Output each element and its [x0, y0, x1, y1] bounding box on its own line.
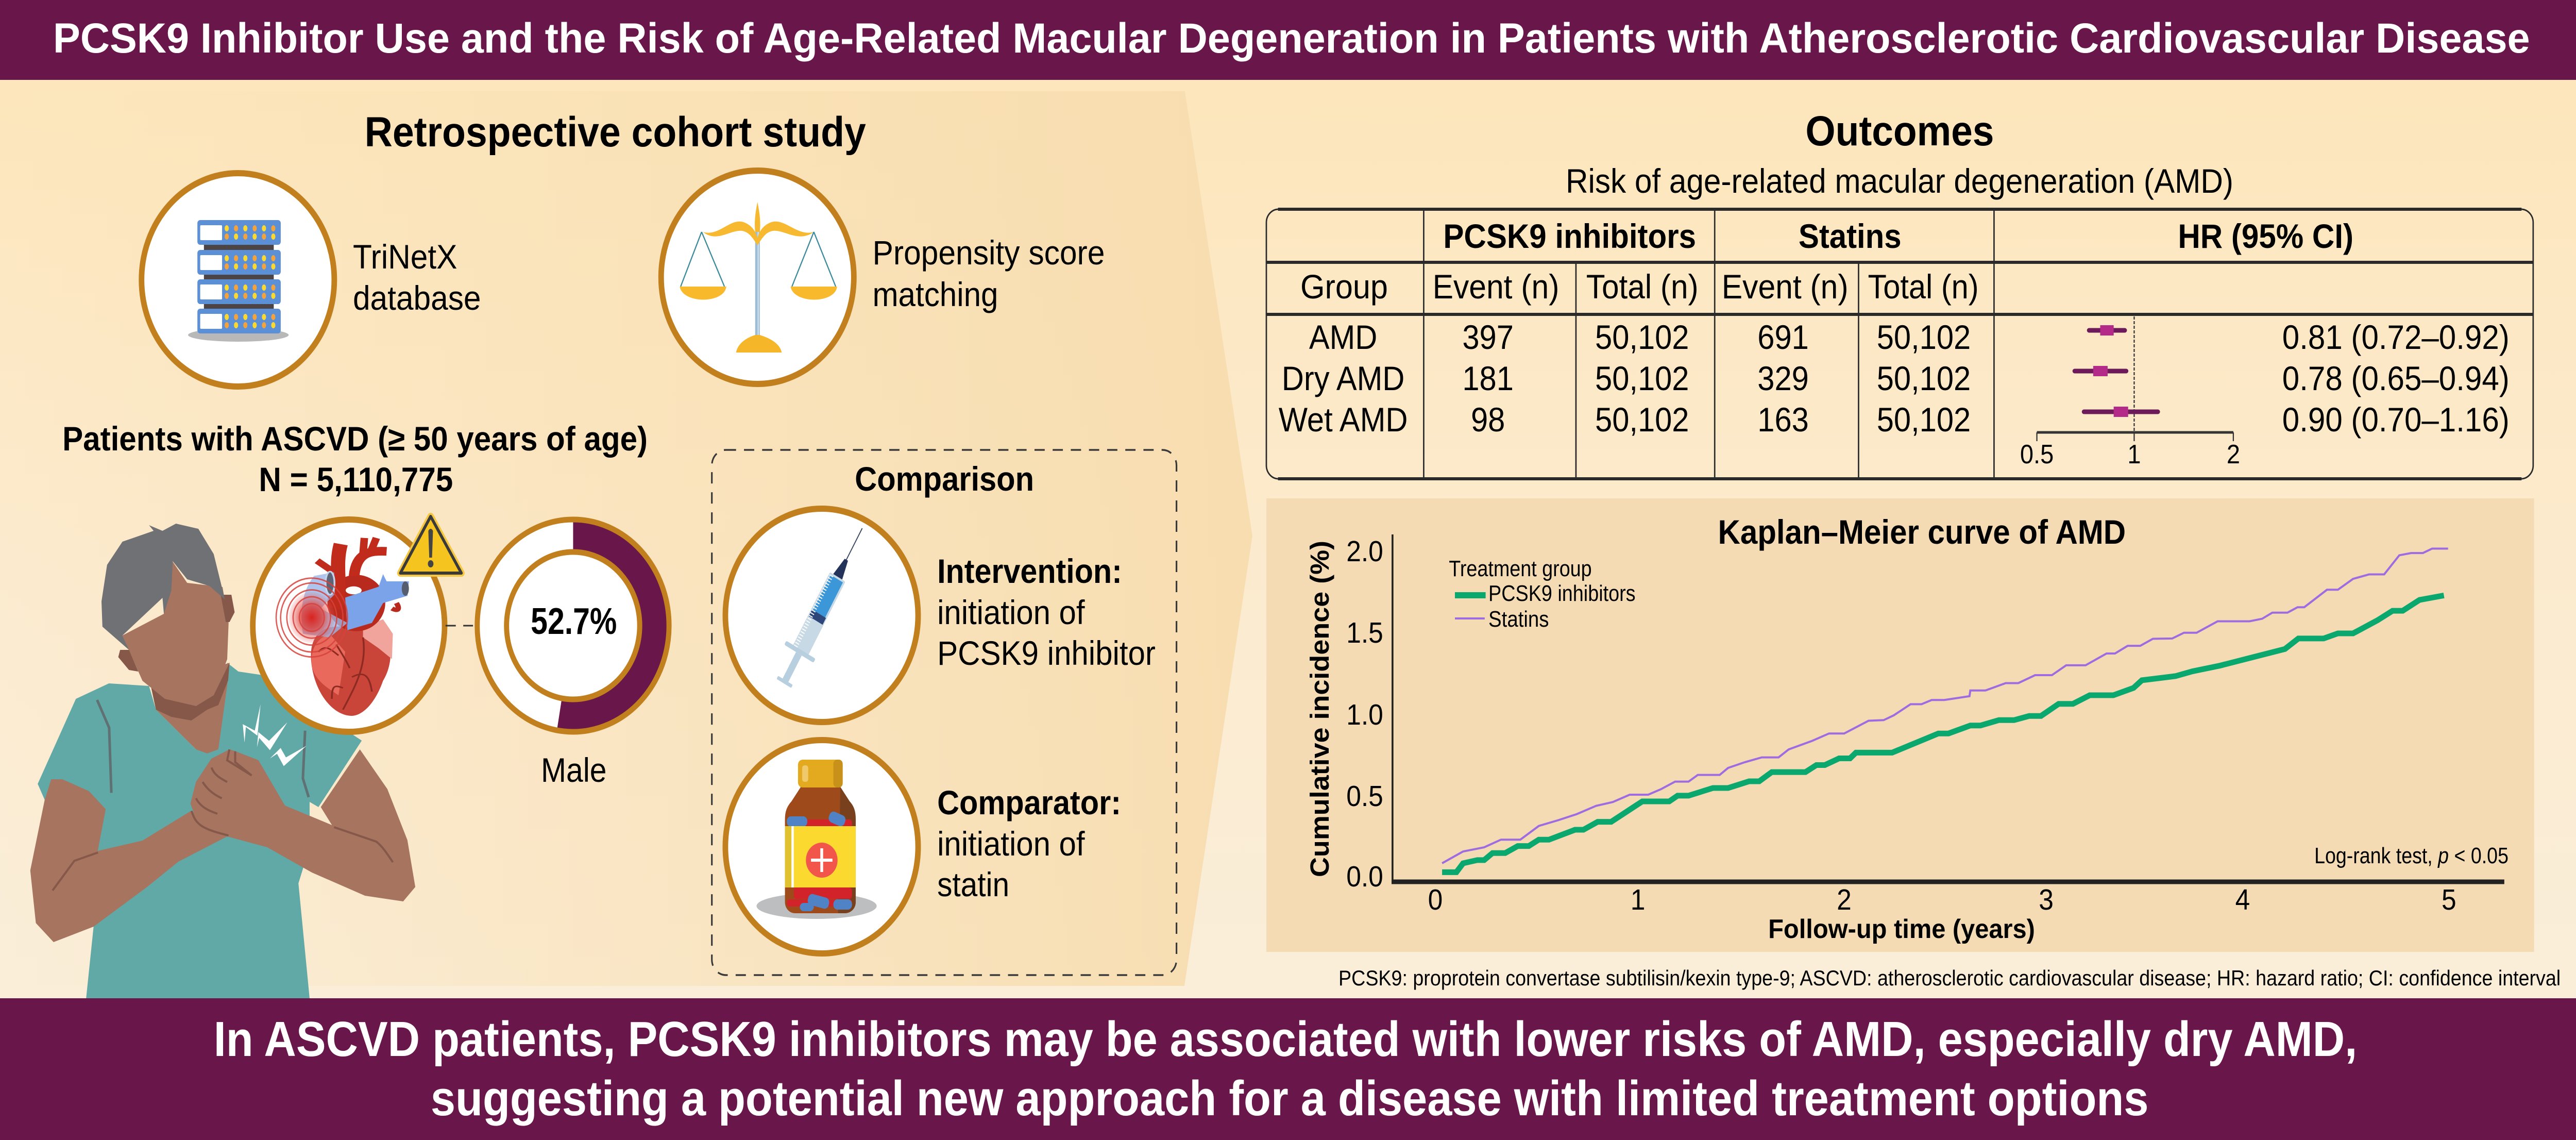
table header row: Statins: [1799, 217, 1902, 256]
icon: syringe: [725, 509, 918, 722]
table row: AMD: 50,102: [1877, 318, 1971, 357]
table row: AMD: 50,102: [1595, 318, 1689, 357]
curve: statins: [1442, 548, 2448, 863]
y axis tick labels: [1346, 535, 1383, 893]
text: intervention: Intervention:: [937, 552, 1122, 591]
title banner: PCSK9 Inhibitor Use and the Risk of Age-Related Macular Degeneration in Patients with Atherosclerotic Cardiovascular Disease: [53, 14, 2530, 62]
panel: comparison: [712, 450, 1177, 975]
table subheader row: [1300, 268, 1979, 306]
annotation: log-rank test: Log-rank test, p < 0.05: [2314, 843, 2509, 868]
table row: dry AMD: 50,102: [1877, 360, 1971, 398]
x axis tick labels: 3: [2039, 883, 2054, 916]
text: comparator: [937, 784, 1121, 904]
footnote: abbreviations: PCSK9: proprotein convertase subtilisin/kexin type-9; ASCVD: atherosclerotic cardiovascular disease; HR: hazard ratio; CI: confidence interval: [1338, 966, 2561, 990]
table row: dry AMD: 50,102: [1595, 360, 1689, 398]
x axis tick labels: 4: [2235, 883, 2250, 916]
table subheader row: Event (n): [1433, 268, 1559, 306]
subheading: risk of AMD: Risk of age-related macular degeneration (AMD): [1566, 162, 2233, 200]
y axis tick labels: 1.0: [1346, 698, 1383, 731]
icon: warning triangle: [400, 516, 462, 573]
text: intervention: initiation of: [937, 594, 1085, 632]
y axis tick labels: 1.5: [1346, 616, 1383, 649]
x axis tick labels: [1428, 883, 2456, 916]
table row: AMD: 691: [1757, 318, 1809, 357]
table row: wet AMD: 98: [1471, 401, 1505, 439]
icon: pill bottle: [725, 740, 918, 953]
text: TriNetX database: [353, 238, 481, 317]
table row: wet AMD: 0.90 (0.70–1.16): [2282, 401, 2510, 439]
chart legend: Treatment group: [1449, 556, 1592, 581]
table row: dry AMD: 329: [1757, 360, 1809, 398]
heading: retrospective cohort study: Retrospective cohort study: [365, 108, 866, 156]
table header row: PCSK9 inhibitors: [1443, 217, 1696, 256]
heading: outcomes: Outcomes: [1805, 107, 1994, 155]
donut chart: male 52.7%: 52.7%: [531, 600, 617, 642]
table subheader row: Total (n): [1868, 268, 1979, 306]
y axis tick labels: 2.0: [1346, 535, 1383, 568]
table subheader row: Total (n): [1586, 268, 1699, 306]
x axis tick labels: 0: [1428, 883, 1443, 916]
heading: comparison: Comparison: [855, 460, 1034, 498]
table row: dry AMD: 181: [1462, 360, 1514, 398]
label: male: Male: [541, 751, 606, 790]
table header row: [1443, 217, 2353, 256]
forest plot: [2020, 316, 2240, 470]
text: patients with ASCVD: N = 5,110,775: [259, 461, 453, 499]
x axis tick labels: 2: [1837, 883, 1852, 916]
table row: dry AMD: 0.78 (0.65–0.94): [2282, 360, 2510, 398]
table row: wet AMD: Wet AMD: [1279, 401, 1408, 439]
axis lines: [1392, 534, 2504, 884]
text: patients with ASCVD: [62, 420, 648, 499]
text: propensity score matching: [872, 234, 1105, 314]
table subheader row: Event (n): [1722, 268, 1849, 306]
icon: TriNetX database server: [142, 173, 334, 387]
table row: wet AMD: [1279, 401, 2510, 439]
text: patients with ASCVD: Patients with ASCVD (≥ 50 years of age): [62, 420, 648, 458]
text: TriNetX database: TriNetX: [353, 238, 457, 276]
panel: outcomes: [1266, 107, 2561, 990]
forest plot: 1: [2127, 439, 2141, 470]
icon: heart with warning: [253, 516, 462, 732]
chart legend: Statins: [1488, 606, 1549, 631]
conclusion banner: [0, 998, 2576, 1140]
table row: wet AMD: 163: [1757, 401, 1809, 439]
x axis tick labels: 1: [1631, 883, 1645, 916]
forest plot: 2: [2227, 439, 2240, 470]
text: comparator: statin: [937, 866, 1009, 904]
icon: pain sparks: [243, 704, 307, 766]
text: intervention: [937, 552, 1156, 673]
chart legend: [1449, 556, 1636, 631]
table row: dry AMD: [1282, 360, 2510, 398]
x axis title: Follow-up time (years): [1768, 914, 2035, 944]
text: comparator: initiation of: [937, 825, 1085, 863]
x axis tick labels: 5: [2442, 883, 2456, 916]
text: propensity score matching: Propensity score: [872, 234, 1105, 272]
table row: AMD: AMD: [1309, 318, 1377, 357]
chart legend: PCSK9 inhibitors: [1488, 580, 1636, 606]
title banner: [0, 0, 2576, 80]
y axis title: Cumulative incidence (%): [1306, 541, 1334, 877]
chart title: Kaplan–Meier curve of AMD: [1718, 513, 2126, 551]
table subheader row: Group: [1300, 268, 1388, 306]
y axis tick labels: 0.5: [1346, 780, 1383, 813]
table header row: HR (95% CI): [2178, 217, 2353, 256]
donut chart: male 52.7%: [477, 519, 669, 732]
illustration: patient holding chest: [30, 524, 415, 998]
table: event counts and hazard ratios: [1266, 209, 2533, 479]
icon: balance scale: [661, 171, 854, 384]
text: comparator: Comparator:: [937, 784, 1121, 822]
table row: AMD: 0.81 (0.72–0.92): [2282, 318, 2510, 357]
table row: dry AMD: Dry AMD: [1282, 360, 1404, 398]
table row: AMD: [1309, 318, 2510, 357]
text: TriNetX database: database: [353, 279, 481, 317]
table row: wet AMD: 50,102: [1877, 401, 1971, 439]
text: intervention: PCSK9 inhibitor: [937, 634, 1156, 673]
text: propensity score matching: matching: [872, 276, 998, 314]
table row: AMD: 397: [1462, 318, 1514, 357]
conclusion banner: In ASCVD patients, PCSK9 inhibitors may be associated with lower risks of AMD, especially dry AMD,: [214, 1012, 2357, 1067]
connector: dashed line from heart to sex donut: [446, 625, 473, 627]
y axis tick labels: 0.0: [1346, 860, 1383, 893]
table row: wet AMD: 50,102: [1595, 401, 1689, 439]
forest plot: 0.5: [2020, 439, 2054, 470]
panel: study design: [0, 91, 1252, 998]
panel: Kaplan-Meier chart: [1266, 498, 2534, 952]
conclusion banner: suggesting a potential new approach for a disease with limited treatment options: [431, 1071, 2148, 1126]
curve: PCSK9 inhibitors: [1442, 595, 2444, 872]
